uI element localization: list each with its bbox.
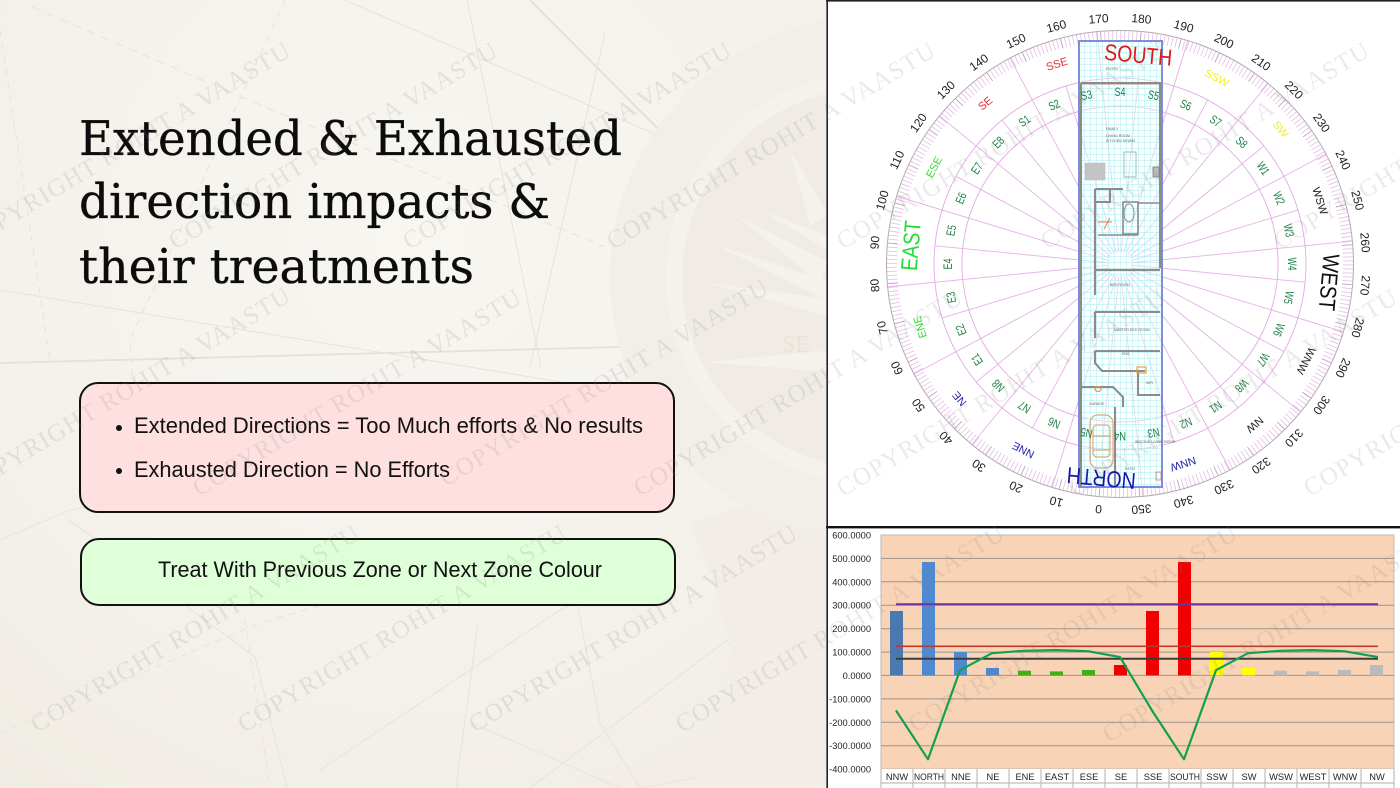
32 zone labels: E8	[990, 133, 1007, 151]
title: direction impacts &	[79, 174, 550, 230]
category table: WEST	[1300, 772, 1327, 782]
degree scale labels: 240	[1332, 148, 1354, 172]
degree scale labels: 300	[1310, 393, 1333, 418]
degree scale labels: 70	[874, 319, 891, 336]
16 direction labels: NE	[950, 389, 969, 408]
degree scale labels: 170	[1088, 11, 1109, 27]
floor plan room labels: ENTRY	[1106, 67, 1119, 71]
panel: treatment: Treat With Previous Zone or Next Zone Colour	[158, 557, 602, 582]
y axis labels: 400.0000	[832, 577, 871, 587]
32 zone labels: S2	[1046, 96, 1062, 114]
degree scale labels: 40	[936, 428, 956, 448]
floor plan room labels: BED ROOM	[1110, 283, 1130, 287]
16 direction labels: ESE	[924, 155, 945, 180]
16 direction labels: NW	[1243, 414, 1265, 435]
32 zone labels	[941, 85, 1299, 443]
degree scale labels: 50	[909, 395, 928, 415]
divider between left and right	[826, 0, 828, 788]
category table: ENE	[1015, 772, 1035, 782]
degree scale labels: 230	[1310, 111, 1333, 135]
16 direction labels: WSW	[1309, 186, 1329, 217]
chart plot area	[881, 535, 1394, 769]
degree scale labels: 330	[1212, 476, 1236, 498]
y axis labels: 100.0000	[832, 648, 871, 658]
16 direction labels: NNE	[1010, 439, 1037, 460]
y axis labels: -100.0000	[829, 694, 871, 704]
copyright watermarks: COPYRIGHT ROHIT A VAASTU	[464, 520, 803, 738]
y axis labels: -400.0000	[829, 765, 871, 775]
copyright watermarks: COPYRIGHT ROHIT A VAASTU	[188, 284, 527, 502]
degree scale labels: 10	[1048, 493, 1065, 510]
bars	[890, 562, 1383, 675]
copyright watermarks: COPYRIGHT ROHIT A VAASTU	[164, 37, 503, 255]
degree scale labels	[867, 11, 1373, 517]
category table: ESE	[1080, 772, 1098, 782]
degree scale labels: 280	[1348, 316, 1367, 339]
32 zone labels: N6	[1046, 414, 1062, 432]
category table: NORTH	[914, 772, 944, 782]
32 zone labels: N8	[989, 376, 1008, 395]
copyright watermarks: COPYRIGHT ROHIT A VAASTU	[832, 284, 1171, 502]
16 direction labels: SE	[976, 95, 995, 113]
title: their treatments	[79, 239, 474, 295]
floor plan room labels: LIVING ROOM	[1106, 134, 1130, 138]
title: Extended & Exhausted	[79, 111, 622, 167]
32 zone labels: W1	[1254, 159, 1273, 178]
title	[79, 111, 622, 295]
16 direction labels: WNW	[1293, 345, 1317, 377]
category table	[881, 769, 1394, 788]
32 zone labels: W8	[1232, 376, 1251, 395]
green line series	[896, 650, 1378, 759]
16 direction labels: WEST	[1314, 253, 1345, 312]
panel: compass floor plan	[826, 0, 1400, 527]
panel: zone bar chart	[826, 526, 1400, 788]
degree scale labels: 310	[1282, 426, 1306, 450]
category table: SW	[1242, 772, 1257, 782]
copyright watermarks: COPYRIGHT ROHIT A VAASTU	[398, 37, 737, 255]
degree scale labels: 180	[1131, 11, 1152, 27]
degree scale labels: 80	[867, 278, 882, 293]
degree scale labels: 60	[888, 359, 906, 377]
16 direction labels: ENE	[912, 314, 930, 339]
32 zone labels: W2	[1270, 189, 1288, 207]
category table: NW	[1369, 772, 1385, 782]
category table: EAST	[1045, 772, 1069, 782]
copyright watermarks: COPYRIGHT ROHIT A VAASTU	[1064, 284, 1400, 502]
category table: SE	[1115, 772, 1127, 782]
degree scale labels: 0	[1094, 502, 1103, 516]
y axis labels: 500.0000	[832, 554, 871, 564]
floor plan room labels: WIR	[1146, 381, 1153, 385]
32 zone labels: E3	[943, 291, 959, 304]
degree scale labels: 120	[907, 110, 930, 135]
16 direction labels: NNW	[1168, 454, 1197, 473]
floor plan room labels: FAMILY	[1106, 127, 1119, 131]
y axis labels: -200.0000	[829, 718, 871, 728]
floor plan grid	[1079, 41, 1162, 487]
32 zone labels: N4	[1114, 429, 1126, 443]
y axis labels: 0.0000	[843, 671, 871, 681]
panel: extended and exhausted definitions	[80, 383, 674, 512]
panel: extended and exhausted definitions: Exhausted Direction = No Efforts	[134, 457, 450, 482]
32 zone labels: E2	[952, 322, 970, 338]
floor plan room labels	[1089, 67, 1175, 471]
y axis labels	[829, 530, 871, 775]
32 zone labels: E1	[968, 351, 986, 368]
category table: NNE	[951, 772, 971, 782]
32 zone labels: E7	[968, 160, 986, 177]
category table: NE	[987, 772, 999, 782]
category table: SOUTH	[1170, 772, 1200, 782]
category table: SSW	[1206, 772, 1228, 782]
16 direction labels	[896, 39, 1345, 494]
floor plan room labels: ENS	[1122, 352, 1130, 356]
32 zone labels: N3	[1146, 425, 1161, 441]
32 zone labels: S8	[1233, 134, 1251, 151]
16 direction labels: SSW	[1203, 68, 1231, 90]
32 zone labels: S5	[1147, 87, 1161, 103]
degree scale labels: 220	[1282, 78, 1306, 102]
copyright watermarks: COPYRIGHT ROHIT A VAASTU	[1036, 37, 1375, 255]
degree scale labels: 130	[934, 78, 958, 102]
32 zone labels: N5	[1079, 425, 1094, 441]
degree scale labels: 150	[1004, 30, 1028, 52]
copyright watermarks: COPYRIGHT ROHIT A VAASTU	[671, 520, 1010, 738]
32 zone labels: E4	[941, 258, 955, 270]
degree scale labels: 30	[969, 456, 988, 475]
degree scale labels: 90	[867, 235, 883, 250]
16 direction labels: SSE	[1045, 56, 1069, 74]
compass rings and tick marks	[873, 17, 1367, 511]
32 zone labels: S1	[1016, 112, 1033, 130]
degree scale labels: 20	[1007, 478, 1025, 496]
32 zone labels: E5	[943, 223, 959, 237]
16 direction labels: SOUTH	[1103, 39, 1173, 71]
panel: treatment	[81, 539, 675, 605]
copyright watermarks: COPYRIGHT ROHIT A VAASTU	[26, 520, 365, 738]
copyright watermarks: COPYRIGHT ROHIT A VAASTU	[832, 37, 1171, 255]
copyright watermarks: COPYRIGHT ROHIT A VAASTU	[904, 520, 1243, 738]
32 zone labels: W3	[1281, 223, 1297, 238]
background: antique map panel	[0, 0, 828, 788]
degree scale labels: 340	[1172, 492, 1195, 511]
icon: car in garage	[1090, 415, 1113, 468]
degree scale labels: 250	[1348, 189, 1367, 212]
category table: NNW	[886, 772, 908, 782]
32 zone labels: N1	[1206, 398, 1224, 416]
background: faint compass rose: SE	[782, 332, 810, 358]
category table: WSW	[1269, 772, 1293, 782]
degree scale labels: 100	[873, 189, 892, 212]
degree scale labels: 200	[1212, 30, 1236, 52]
y axis labels: 600.0000	[832, 530, 871, 540]
horizontal gridlines	[881, 558, 1394, 746]
degree scale labels: 140	[967, 51, 991, 74]
32 zone labels: N2	[1177, 414, 1194, 432]
floor plan room labels: SECOND LIVING ROOM	[1135, 440, 1175, 444]
category table: WNW	[1333, 772, 1357, 782]
copyright watermarks: COPYRIGHT ROHIT A VAASTU	[602, 37, 941, 255]
degree scale labels: 320	[1249, 454, 1273, 477]
32 zone labels: S3	[1080, 87, 1093, 103]
copyright watermarks: COPYRIGHT ROHIT A VAASTU	[435, 274, 774, 492]
32 zone labels: W6	[1270, 321, 1288, 339]
degree scale labels: 290	[1332, 356, 1354, 380]
floor plan walls and rooms	[1079, 41, 1162, 487]
floor plan room labels: PATIO	[1125, 467, 1135, 471]
32 zone labels: S6	[1178, 97, 1194, 114]
y axis labels: -300.0000	[829, 741, 871, 751]
y axis labels: 200.0000	[832, 624, 871, 634]
degree scale labels: 190	[1172, 17, 1195, 36]
32 zone labels: W4	[1285, 258, 1299, 271]
copyright watermarks: COPYRIGHT ROHIT A VAASTU	[629, 284, 968, 502]
copyright watermarks: COPYRIGHT ROHIT A VAASTU	[233, 520, 572, 738]
y axis labels: 300.0000	[832, 601, 871, 611]
degree scale labels: 160	[1045, 17, 1068, 36]
floor plan room labels: MASTER BED ROOM	[1114, 328, 1150, 332]
16 direction labels: EAST	[896, 220, 926, 272]
32 zone labels: S4	[1114, 85, 1126, 99]
panel: extended and exhausted definitions: Extended Directions = Too Much efforts & No results	[134, 413, 643, 438]
floor plan room labels: KITCHEN DINING	[1106, 139, 1136, 143]
degree scale labels: 350	[1131, 501, 1152, 517]
32 zone labels: S7	[1207, 112, 1224, 130]
degree scale labels: 110	[887, 148, 908, 172]
32 zone labels: W7	[1253, 350, 1272, 369]
reference lines	[896, 604, 1378, 659]
16 direction labels: SW	[1270, 119, 1291, 141]
32 zone labels: E6	[953, 190, 970, 206]
category table: SSE	[1144, 772, 1162, 782]
32 zone labels: W5	[1281, 290, 1297, 306]
background: faint compass rose	[610, 16, 1134, 788]
zone dividing lines	[888, 32, 1352, 496]
32 zone labels: N7	[1015, 398, 1033, 416]
floor plan room labels: GARAGE	[1089, 402, 1105, 406]
degree scale labels: 260	[1357, 232, 1373, 253]
degree scale labels: 210	[1249, 51, 1274, 74]
16 direction labels: NORTH	[1066, 462, 1137, 494]
degree scale labels: 270	[1357, 275, 1373, 296]
